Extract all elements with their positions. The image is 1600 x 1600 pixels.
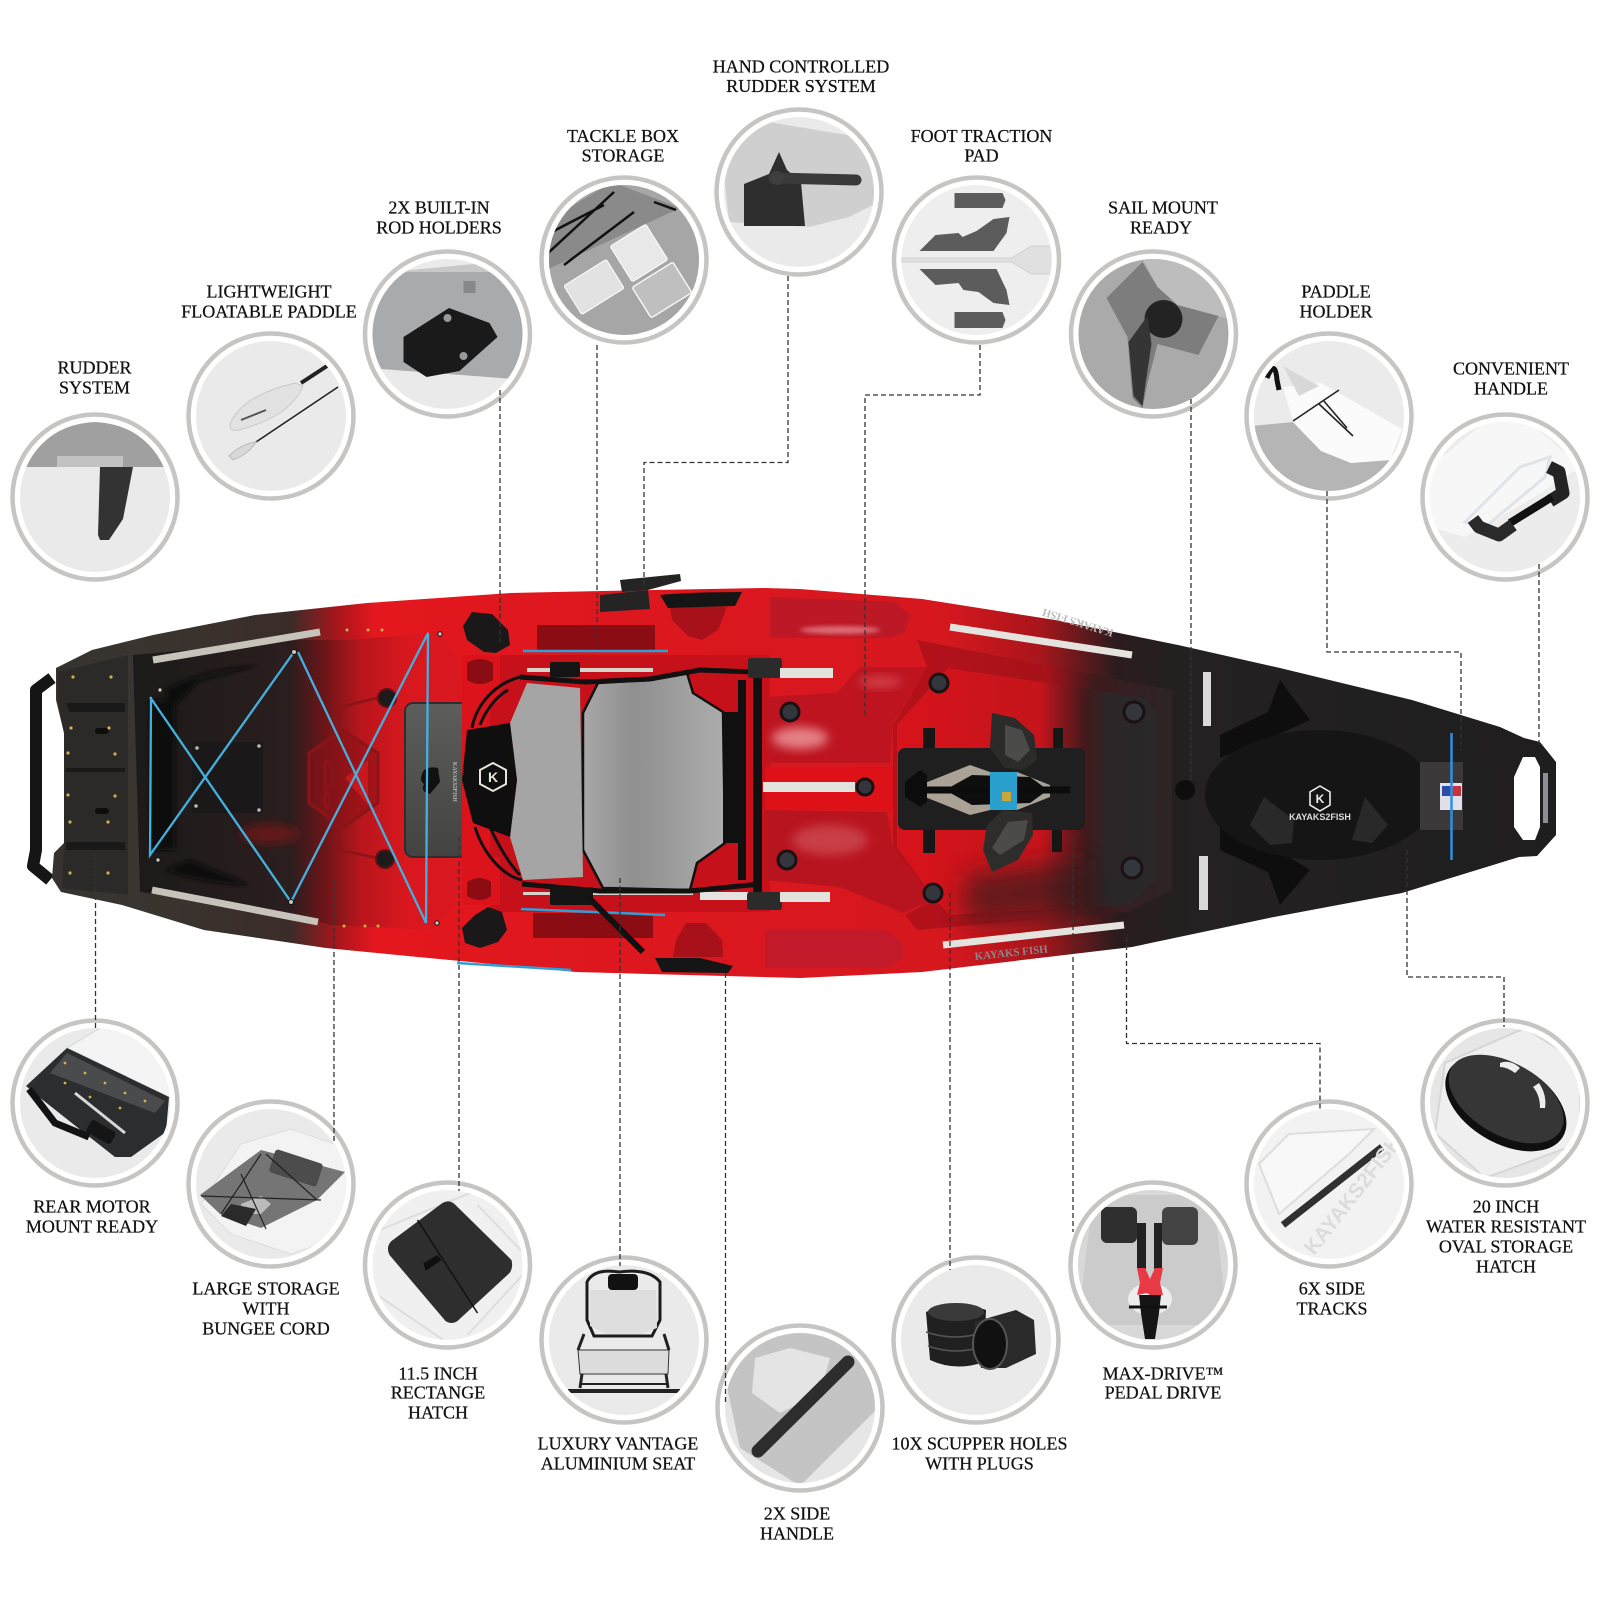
heading: HANDLE: [760, 1524, 834, 1544]
hoops: [472, 677, 522, 880]
kayak: [33, 574, 1556, 978]
heading: 20 INCH: [1473, 1196, 1539, 1216]
callout: paddle holder: [1246, 282, 1412, 498]
foot well: [893, 640, 1172, 930]
callout: rectangle hatch: [365, 1182, 530, 1422]
connector: tackle box: [596, 345, 598, 650]
oval storage hatch: [1205, 730, 1435, 860]
buckles: [550, 662, 593, 905]
heading: TRACKS: [1296, 1298, 1368, 1318]
drive cyan housing: [990, 772, 1017, 810]
rod holders: [462, 612, 510, 948]
heading: HATCH: [1476, 1256, 1536, 1276]
heading: PADDLE: [1301, 282, 1371, 302]
thumbnail: rudder: [12, 414, 178, 580]
heading: HAND CONTROLLED: [713, 56, 889, 76]
bow panel with flag: [1420, 733, 1463, 860]
thumbnail: rod holder: [365, 252, 530, 416]
heading: PEDAL DRIVE: [1105, 1382, 1221, 1402]
bungee anchors: [156, 632, 442, 925]
frame top and bottom: [520, 670, 760, 891]
heading: MAX-DRIVE™: [1103, 1364, 1223, 1384]
callout: large storage with bungee cord: [188, 1102, 354, 1338]
thumbnail: seat: [542, 1258, 706, 1422]
thumbnail: storage: [188, 1102, 354, 1266]
callout: scupper holes with plugs: [891, 1258, 1068, 1474]
heading: ROD HOLDERS: [376, 218, 502, 238]
thumbnail: oval hatch: [1422, 1020, 1588, 1186]
rear plate: [192, 742, 263, 813]
heading: WATER RESISTANT: [1426, 1216, 1586, 1236]
oval storage hatch: KAYAKS2FISH: [1289, 812, 1351, 822]
heading: LIGHTWEIGHT: [207, 282, 331, 302]
callout: hand controlled rudder system: [713, 56, 889, 274]
callout: oval storage hatch: [1422, 1020, 1588, 1276]
seat rails: [523, 668, 748, 900]
pedal drive plate: [898, 748, 1085, 830]
heading: HANDLE: [1474, 378, 1548, 398]
heading: 11.5 INCH: [398, 1364, 478, 1384]
vertical small tracks: [1199, 672, 1211, 910]
connector: rod holders: [499, 390, 501, 642]
thumbnail: paddle: [188, 334, 354, 498]
heading: HATCH: [408, 1402, 468, 1422]
heading: HOLDER: [1300, 302, 1372, 322]
hull lettering: KAYAKS FISH: [974, 943, 1049, 963]
frame brackets: [747, 658, 782, 910]
seat back cushion: [510, 683, 583, 880]
connector: pedal drive: [1072, 837, 1074, 1232]
deck panels: [765, 667, 933, 913]
heading: 6X SIDE: [1299, 1278, 1365, 1298]
seat base cushion: [583, 673, 725, 890]
bow raised ridges: [1220, 680, 1310, 905]
connector: large storage: [333, 880, 335, 1141]
connector: convenient handle: [1538, 564, 1540, 747]
connector: oval hatch: [1407, 850, 1504, 1027]
scupper holes at rear: [376, 689, 396, 868]
rectangle hatch: KAYAKS2FISH: [451, 762, 457, 802]
thumbnail: paddle holder: [1246, 334, 1412, 498]
heading: FLOATABLE PADDLE: [181, 302, 357, 322]
connector: paddle holder: [1327, 491, 1461, 750]
heading: RUDDER SYSTEM: [726, 76, 876, 96]
mid deck shading: [462, 655, 770, 912]
heading: SAIL MOUNT: [1108, 198, 1218, 218]
connector: side handle: [724, 973, 726, 1402]
rear carry handle: [33, 678, 52, 880]
handle pockets: [670, 607, 727, 957]
scupper plugs: [778, 674, 1144, 902]
heading: CONVENIENT: [1453, 358, 1569, 378]
heading: REAR MOTOR: [33, 1196, 151, 1216]
heading: STORAGE: [582, 146, 664, 166]
heading: LUXURY VANTAGE: [538, 1434, 698, 1454]
black side panel: [723, 712, 740, 843]
heading: READY: [1130, 218, 1192, 238]
thumbnail: track: [1246, 1102, 1412, 1266]
heading: OVAL STORAGE: [1439, 1236, 1573, 1256]
rectangle hatch: [405, 703, 487, 857]
rear storage well: [133, 632, 462, 930]
callout: rudder system: [12, 358, 178, 580]
rim screws: [342, 628, 384, 928]
upper and lower raised side panels: [765, 597, 910, 968]
connector: foot pad: [865, 345, 980, 715]
callout: tackle box storage: [542, 126, 706, 342]
plate straps: [923, 728, 1063, 853]
thumbnail: sail mount: [1071, 252, 1236, 416]
heading: TACKLE BOX: [567, 126, 679, 146]
thumbnail: side handle: [718, 1326, 882, 1490]
connector: rear motor mount: [94, 855, 96, 1028]
pedal drive: [898, 713, 1085, 872]
heading: 2X BUILT-IN: [388, 198, 490, 218]
thumbnail: pedal drive: [1070, 1182, 1236, 1348]
callout: luxury vantage aluminium seat: [538, 1258, 706, 1474]
callout: sail mount ready: [1071, 198, 1236, 416]
thumbnail: hatch: [365, 1182, 530, 1348]
thumbnail: tackle boxes: [542, 178, 706, 342]
heading: FOOT TRACTION: [911, 126, 1052, 146]
heading: SYSTEM: [59, 378, 130, 398]
logo on seat: [480, 763, 506, 791]
heading: ALUMINIUM SEAT: [541, 1454, 695, 1474]
side handles: [655, 592, 742, 973]
bungee cord: [150, 633, 428, 923]
frame uprights: [738, 660, 762, 907]
hand controlled rudder lever: [600, 574, 681, 612]
blue rods: [457, 651, 668, 970]
hull lettering: [974, 606, 1115, 963]
hatch logo: [1310, 786, 1330, 811]
callout: side tracks: [1246, 1102, 1412, 1318]
thumbnail: foot pads: [894, 178, 1059, 342]
callout: max-drive pedal drive: [1070, 1182, 1236, 1402]
pedals: [990, 713, 1037, 770]
callout: foot traction pad: [894, 126, 1059, 342]
heading: RECTANGE: [391, 1382, 485, 1402]
connector: seat: [619, 878, 621, 1266]
seat: [462, 658, 782, 952]
forward deck tracks: [763, 668, 855, 902]
side tracks rear: [152, 632, 320, 922]
thumbnail: hand rudder: [716, 110, 882, 274]
heading: PAD: [964, 146, 999, 166]
hexagon logo moulding: [309, 698, 378, 858]
connector: hand rudder: [644, 276, 788, 585]
thumbnail: rear motor mount: [12, 1020, 178, 1186]
heading: MOUNT READY: [26, 1216, 158, 1236]
hull lettering: KAYAKS FISH: [1041, 606, 1115, 639]
heading: RUDDER: [57, 358, 132, 378]
seat strap: [588, 897, 643, 952]
heading: 10X SCUPPER HOLES: [891, 1434, 1068, 1454]
hull: [52, 588, 1556, 978]
thumbnail: handle: [1422, 414, 1588, 580]
connector: sail mount: [1190, 399, 1192, 780]
callout: lightweight floatable paddle: [181, 282, 357, 498]
connector: side tracks: [1126, 937, 1320, 1109]
connector: rectangle hatch: [458, 837, 460, 1191]
bow handle opening: [1514, 757, 1548, 840]
heading: WITH: [243, 1298, 289, 1318]
heading: WITH PLUGS: [925, 1454, 1034, 1474]
long front tracks: [943, 627, 1132, 945]
callout: side handle: [718, 1326, 882, 1544]
thumbnail: plugs: [894, 1258, 1058, 1422]
callout: convenient handle: [1422, 358, 1588, 580]
connector: scupper holes: [949, 893, 951, 1270]
thumbnail: track: KAYAKS2FISH: [1300, 1131, 1407, 1259]
callout: rear motor mount ready: [12, 1020, 178, 1236]
headrest: [462, 723, 517, 837]
oval storage hatch: K: [1316, 792, 1325, 806]
logo on seat: K: [488, 769, 498, 785]
heading: LARGE STORAGE: [192, 1278, 340, 1298]
heading: BUNGEE CORD: [202, 1318, 330, 1338]
moulded pockets: [467, 625, 655, 938]
callout: rod holders: [365, 198, 530, 416]
rear motor mount block: [58, 655, 128, 895]
mid post: [1175, 780, 1195, 800]
heading: 2X SIDE: [764, 1504, 830, 1524]
